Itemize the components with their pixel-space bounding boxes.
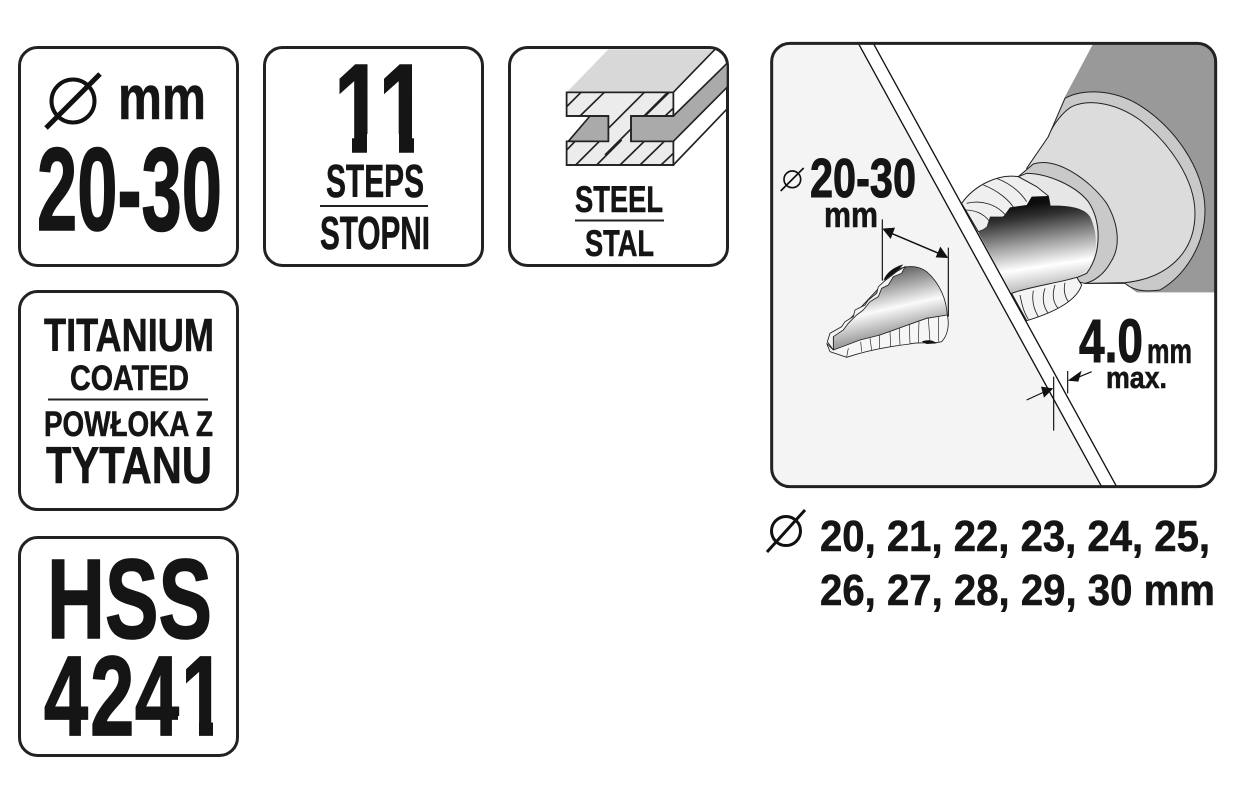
text: mm: mm xyxy=(118,64,206,133)
arrow: thickness dimension xyxy=(1027,371,1092,431)
text: 4241: 4241 xyxy=(44,633,225,759)
text: COATED: COATED xyxy=(70,359,189,398)
text: 20-30: 20-30 xyxy=(810,147,916,209)
text: STAL: STAL xyxy=(585,223,654,264)
text: STEPS: STEPS xyxy=(326,155,424,207)
icon: small diameter symbol xyxy=(781,168,804,191)
text: mm: mm xyxy=(1147,332,1192,371)
text: 20-30: 20-30 xyxy=(37,124,222,256)
icon: diameter symbol xyxy=(767,510,805,552)
panel: HSS 4241 xyxy=(20,536,238,759)
panel: diameter range xyxy=(20,48,238,266)
panel: drilling illustration xyxy=(772,43,1216,487)
text: max.: max. xyxy=(1106,360,1167,395)
text: STOPNI: STOPNI xyxy=(320,207,430,259)
text: TYTANU: TYTANU xyxy=(46,437,212,495)
panel: steel material xyxy=(510,48,728,266)
text: HSS: HSS xyxy=(47,536,212,662)
icon: steel profile xyxy=(567,49,728,165)
icon: drill and step bit xyxy=(772,43,1216,487)
panel: titanium coated xyxy=(20,292,238,510)
text: POWŁOKA Z: POWŁOKA Z xyxy=(44,405,213,444)
text: TITANIUM: TITANIUM xyxy=(44,309,214,361)
text: STEEL: STEEL xyxy=(575,179,663,220)
text: 11: 11 xyxy=(334,38,428,179)
panel: 11 steps xyxy=(264,38,482,266)
icon: diameter symbol xyxy=(46,74,100,128)
text: 4.0: 4.0 xyxy=(1079,307,1143,375)
arrow: bit diameter dimension xyxy=(882,219,948,317)
text: mm: mm xyxy=(824,194,878,235)
